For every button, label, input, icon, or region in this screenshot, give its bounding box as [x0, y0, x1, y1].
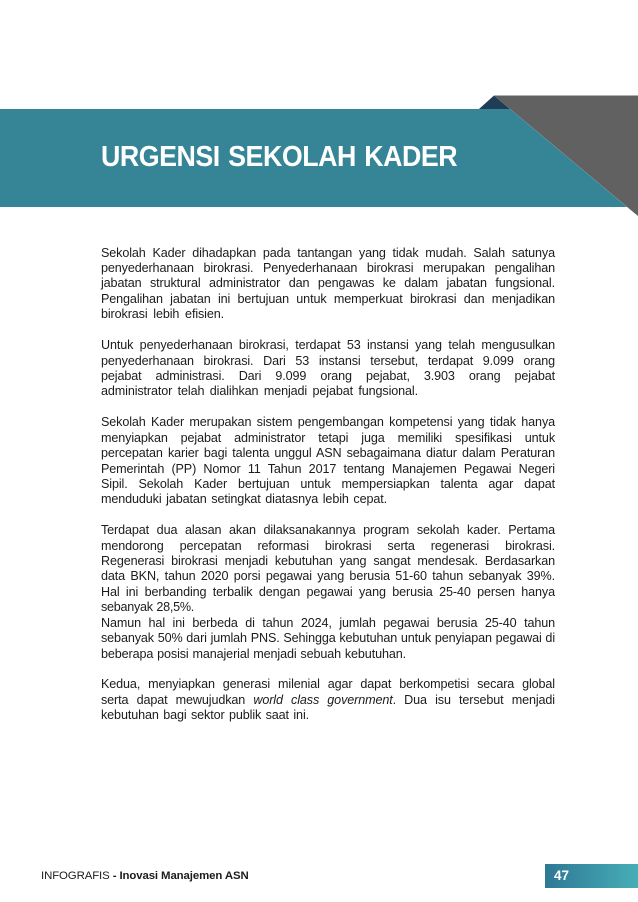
body text: data BKN, tahun 2020 porsi pegawai yang berusia 51-60 tahun sebanyak 39%. [101, 569, 555, 583]
title: URGENSI SEKOLAH KADER [101, 141, 457, 173]
body text: serta dapat mewujudkan world class government. Dua isu tersebut menjadi [101, 693, 555, 707]
body text: Sipil. Sekolah Kader bertujuan untuk mempersiapkan talenta agar dapat [101, 477, 555, 491]
body text: sebanyak 50% dari jumlah PNS. Sehingga kebutuhan untuk penyiapan pegawai di [101, 631, 555, 645]
body text: Sekolah Kader merupakan sistem pengembangan kompetensi yang tidak hanya [101, 415, 555, 429]
body text: Untuk penyederhanaan birokrasi, terdapat 53 instansi yang telah mengusulkan [101, 338, 555, 352]
body text: Kedua, menyiapkan generasi milenial agar dapat berkompetisi secara global [101, 677, 555, 691]
body text: mendorong percepatan reformasi birokrasi serta regenerasi birokrasi. [101, 539, 555, 553]
page number [545, 864, 638, 888]
body text: birokrasi lebih efisien. [101, 307, 224, 321]
body text: Hal ini berbanding terbalik dengan pegawai yang berusia 25-40 persen hanya [101, 585, 555, 599]
body text: menduduki jabatan setingkat diatasnya lebih cepat. [101, 492, 387, 506]
body text: Pengalihan jabatan ini bertujuan untuk memperkuat birokrasi dan menjadikan [101, 292, 555, 306]
footer label: INFOGRAFIS - Inovasi Manajemen ASN [41, 870, 249, 882]
body text: pejabat administrasi. Dari 9.099 orang pejabat, 3.903 orang pejabat [101, 369, 555, 383]
banner shapes [0, 96, 638, 216]
body text: Regenerasi birokrasi menjadi kebutuhan yang sangat mendesak. Berdasarkan [101, 554, 555, 568]
body text: beberapa posisi manajerial menjadi sebuah kebutuhan. [101, 647, 406, 661]
body text [100, 246, 556, 722]
body text: menyiapkan pejabat administrator tetapi juga memiliki spesifikasi untuk [101, 431, 555, 445]
body text: Namun hal ini berbeda di tahun 2024, jumlah pegawai berusia 25-40 tahun [101, 616, 555, 630]
body text: penyederhanaan birokrasi. Penyederhanaan birokrasi merupakan pengalihan [101, 261, 555, 275]
body text: percepatan karier bagi talenta unggul ASN sebagaimana diatur dalam Peraturan [101, 446, 555, 460]
body text: kebutuhan bagi sektor publik saat ini. [101, 708, 309, 722]
body text: Sekolah Kader dihadapkan pada tantangan yang tidak mudah. Salah satunya [101, 246, 555, 260]
body text: Pemerintah (PP) Nomor 11 Tahun 2017 tentang Manajemen Pegawai Negeri [101, 462, 555, 476]
body text: administrator telah dialihkan menjadi pejabat fungsional. [101, 384, 418, 398]
body text: jabatan struktural administrator dan pengawas ke dalam jabatan fungsional. [101, 276, 555, 290]
body text: sebanyak 28,5%. [101, 600, 194, 614]
body text: Terdapat dua alasan akan dilaksanakannya program sekolah kader. Pertama [101, 523, 555, 537]
body text: penyederhanaan birokrasi. Dari 53 instansi tersebut, terdapat 9.099 orang [101, 354, 555, 368]
page number: 47 [554, 868, 569, 883]
